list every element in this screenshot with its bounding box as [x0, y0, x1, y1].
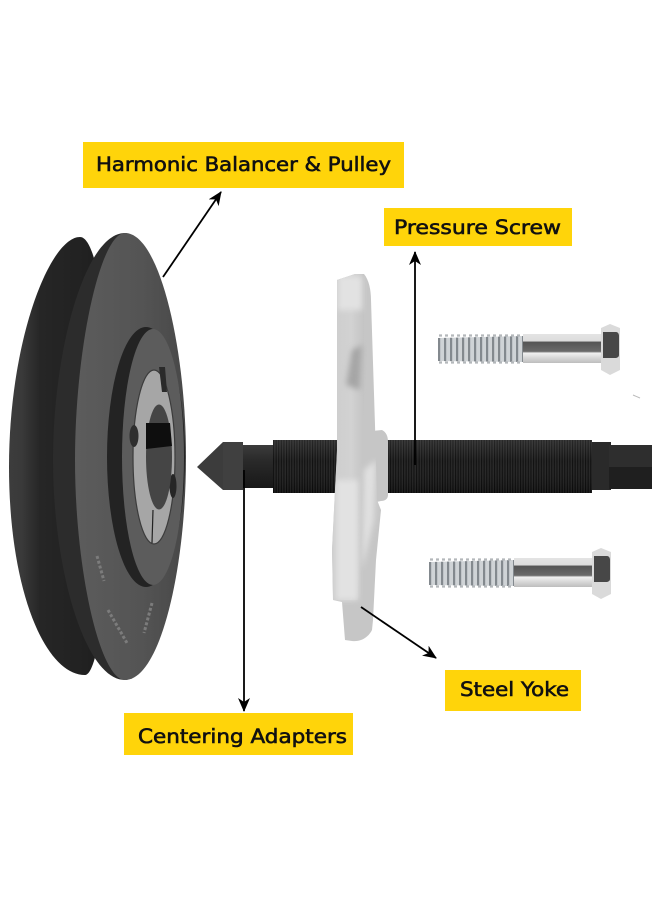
arrow: balancer: [163, 192, 221, 277]
pressure screw: [197, 440, 652, 493]
label: centering adapters: [124, 713, 353, 755]
back disc of pulley: [9, 237, 112, 675]
yoke plate: [332, 274, 381, 641]
label: steel yoke: [445, 670, 581, 711]
steel yoke: [332, 274, 388, 641]
pulley: [9, 233, 186, 680]
yoke soft shading: [332, 274, 376, 600]
hex end: [609, 445, 652, 489]
lower bolt: [429, 548, 611, 599]
bolt head: [601, 324, 620, 375]
exploded tool diagram: [9, 142, 652, 755]
bushing screw slot left: [130, 425, 138, 447]
bushing split: [152, 510, 153, 543]
label: steel yoke: Steel Yoke: [460, 678, 569, 701]
label: harmonic balancer and pulley: Harmonic Balancer & Pulley: [96, 153, 391, 176]
bushing screw slot top: [159, 367, 167, 392]
arrow: pressure screw: [414, 252, 416, 465]
front rim: [53, 233, 170, 680]
cone tip: [197, 442, 223, 490]
label: pressure screw: [384, 208, 572, 246]
tip collar: [223, 442, 243, 490]
front disc face: [75, 233, 186, 680]
label: centering adapters: Centering Adapters: [138, 725, 347, 748]
bolt shank: [514, 558, 592, 587]
arrow: centering adapters: [243, 470, 245, 711]
bolt shank: [523, 334, 601, 363]
bushing screw slot right: [170, 474, 176, 498]
bolt threads: [429, 560, 514, 586]
bolt head: [592, 548, 611, 599]
stray speck: [633, 395, 640, 398]
washer: [372, 430, 388, 503]
shank: [243, 445, 274, 488]
hub face: [122, 329, 184, 585]
keyway: [146, 423, 172, 449]
taper bushing: [133, 370, 175, 544]
label: harmonic balancer and pulley: [83, 142, 404, 188]
label: pressure screw: Pressure Screw: [394, 216, 561, 239]
stamped marks on pulley: [97, 556, 152, 643]
arrow: steel yoke: [361, 607, 436, 658]
threads: [273, 440, 592, 493]
upper bolt: [438, 324, 620, 375]
bore: [146, 404, 172, 510]
bolt threads: [438, 336, 523, 362]
hub recess ring: [107, 327, 185, 587]
end collar: [592, 442, 611, 490]
